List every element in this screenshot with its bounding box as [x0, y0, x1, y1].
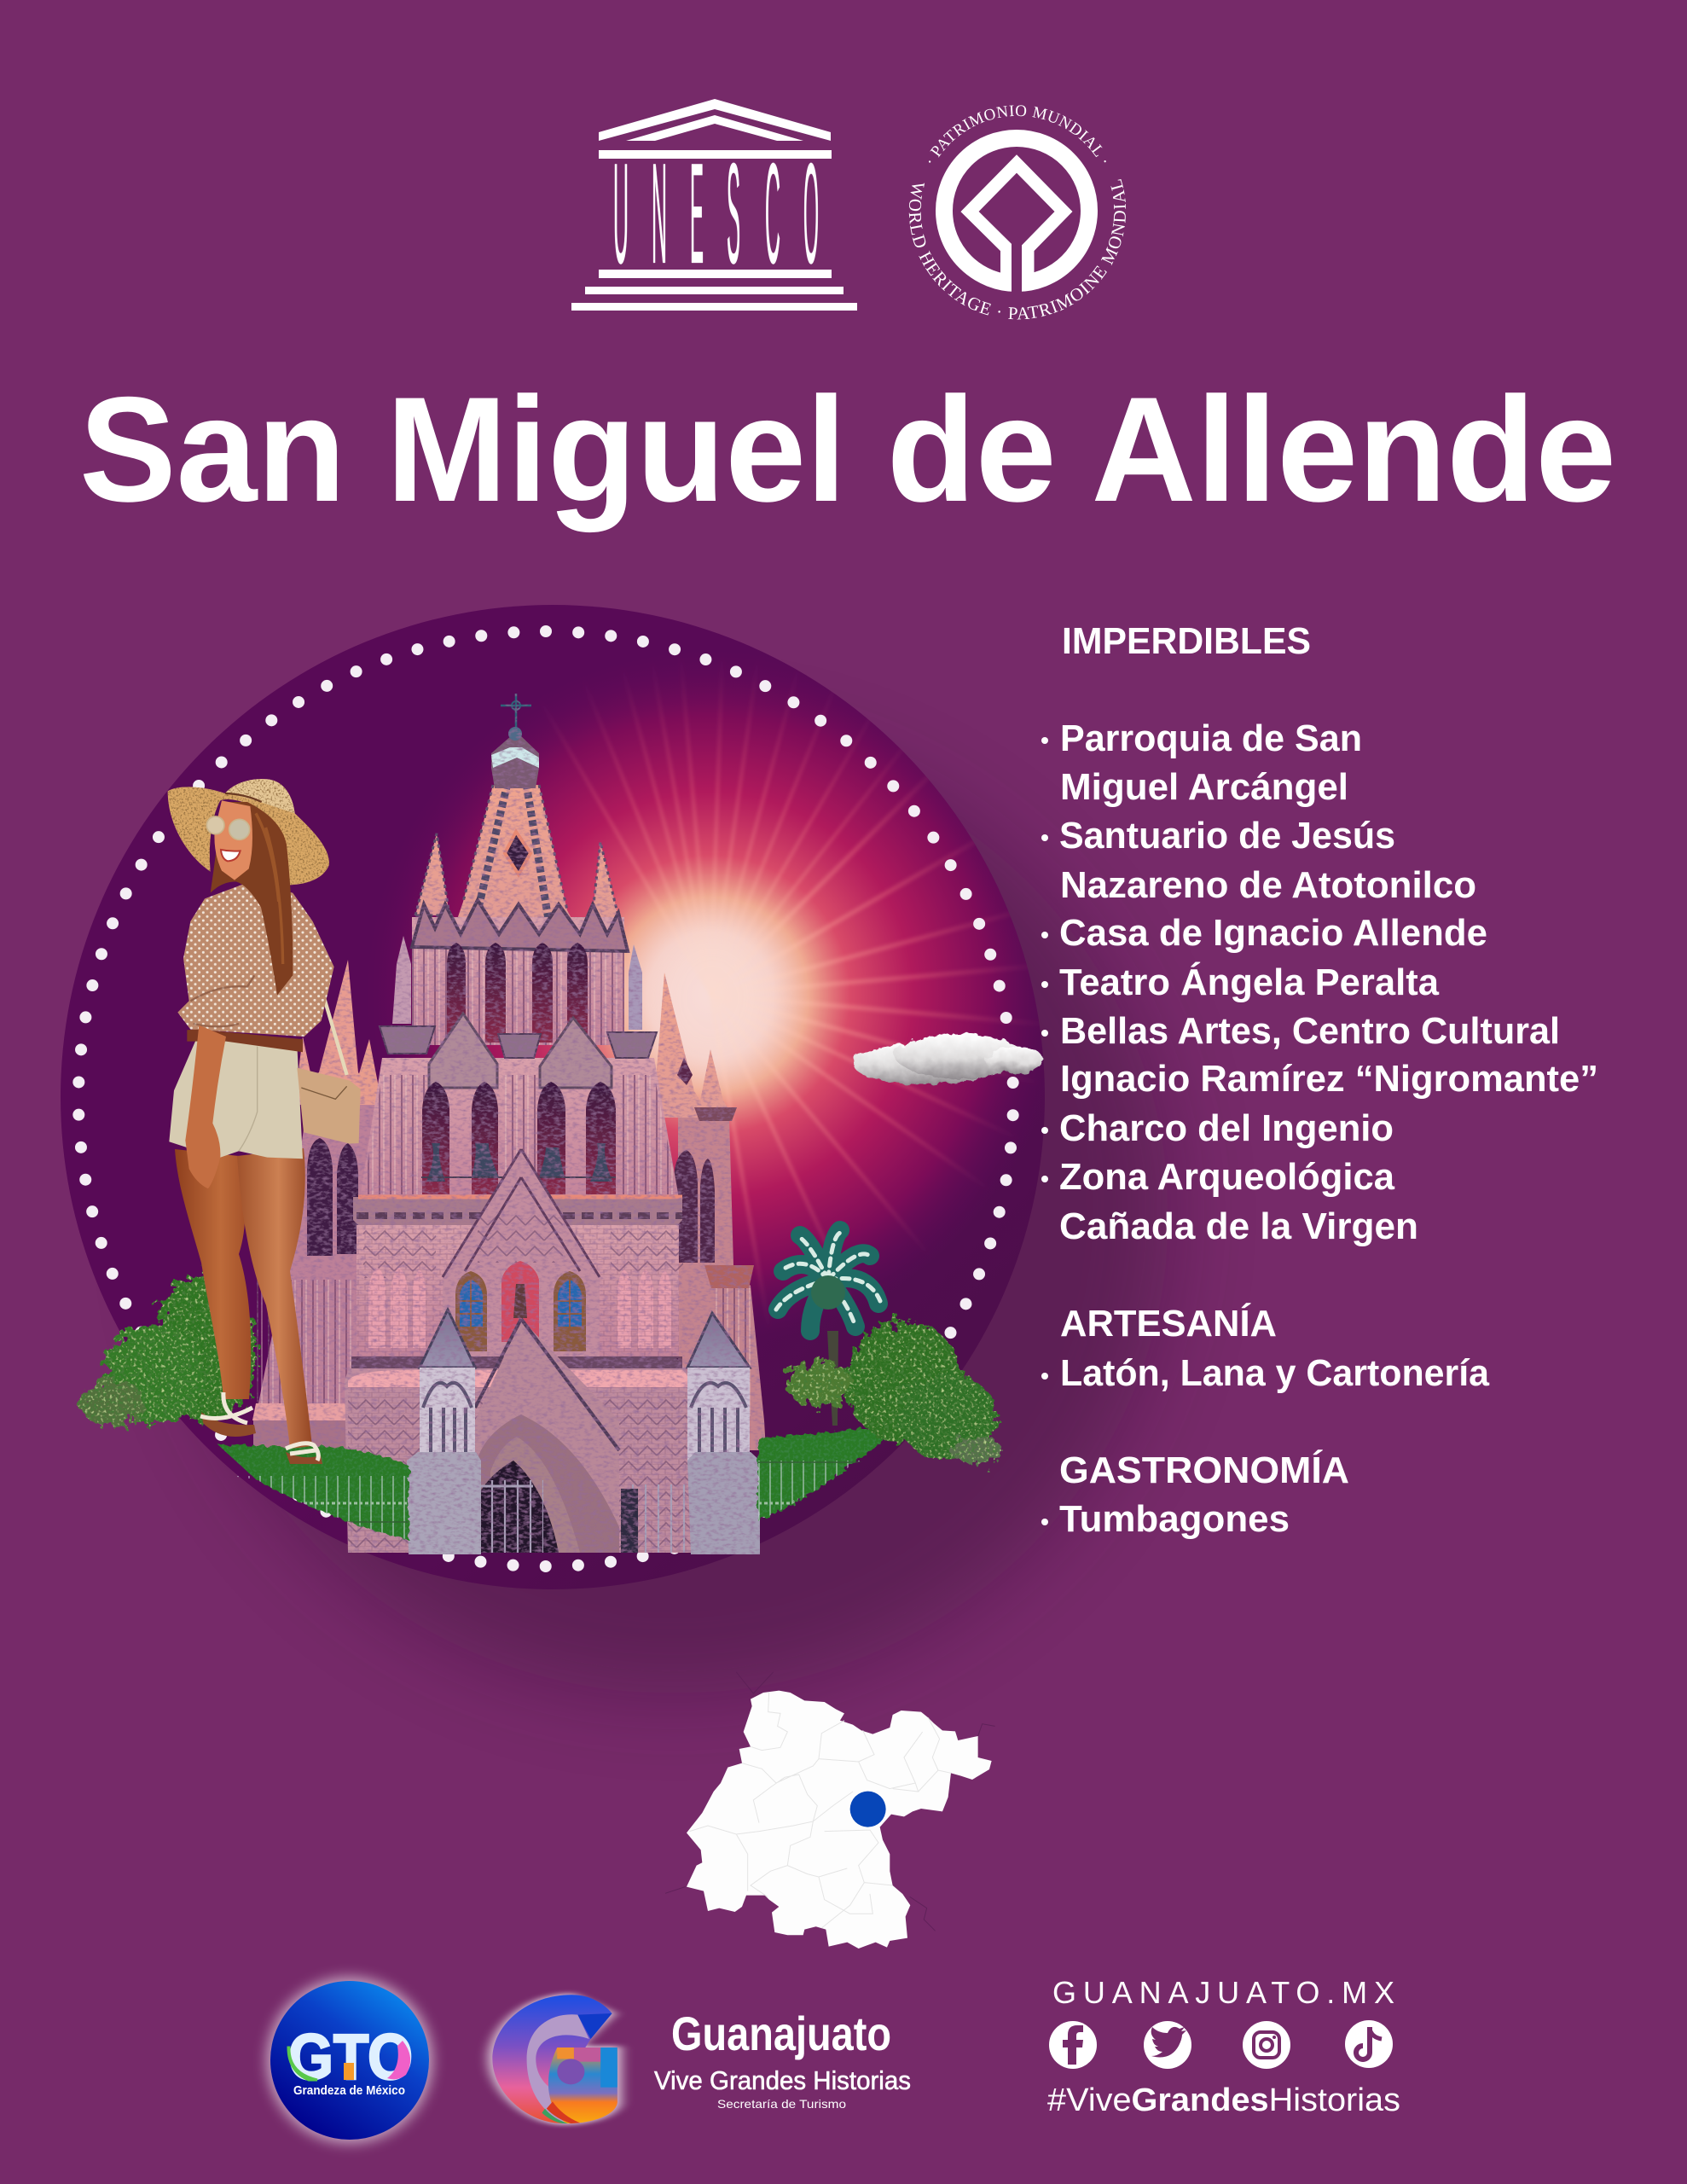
icon: tiktok: [1345, 2020, 1393, 2068]
hat: [168, 779, 329, 885]
list: must-see places: Ignacio Ramírez “Nigromante”: [1060, 1058, 1598, 1100]
left tree behind church: [80, 1273, 256, 1427]
railings: [421, 1176, 616, 1178]
logo: UNESCO temple: S: [727, 133, 740, 293]
logo: World Heritage emblem: [909, 105, 1126, 319]
shorts: [169, 1039, 303, 1159]
circle shadow: [179, 738, 1168, 1693]
heading: IMPERDIBLES: IMPERDIBLES: [1062, 620, 1311, 662]
list: must-see places: Santuario de Jesús: [1059, 815, 1395, 857]
cloud: [853, 1034, 1044, 1084]
list: must-see places: Zona Arqueológica: [1059, 1156, 1395, 1198]
logo: GTO: Grandeza de México: [293, 2083, 405, 2098]
sandals: [200, 1392, 322, 1464]
right tree: [786, 1321, 1002, 1464]
list: must-see places: Nazareno de Atotonilco: [1060, 864, 1476, 906]
second level: [359, 1058, 680, 1203]
hedges and fences: [217, 1425, 904, 1540]
logo: GTO: GTO: [288, 2021, 413, 2093]
icon: instagram: [1243, 2021, 1290, 2069]
list: must-see places: Cañada de la Virgen: [1059, 1205, 1418, 1247]
logo: World Heritage emblem: WORLD HERITAGE · PATRIMOINE MONDIAL: [909, 179, 1126, 319]
list: food: Tumbagones: [1059, 1498, 1290, 1540]
dotted ring: [78, 631, 1013, 1566]
sunglasses: [206, 816, 224, 834]
windows: [455, 1261, 586, 1351]
list: must-see places: Bellas Artes, Centro Cultural: [1060, 1010, 1560, 1052]
arm: [185, 1025, 226, 1188]
right wing: [678, 1101, 766, 1450]
text: O: [803, 133, 819, 293]
left gray pinnacle: [420, 1310, 475, 1368]
bag strap: [315, 967, 347, 1075]
church: [252, 694, 766, 1554]
left wing: [253, 1101, 375, 1450]
upper openings: [447, 943, 588, 1043]
bells: [426, 1143, 612, 1182]
bell openings: [422, 1082, 616, 1194]
right gray pinnacle: [687, 1313, 750, 1368]
cornice: [353, 1197, 682, 1229]
smile: [221, 850, 241, 861]
icon: twitter: [1144, 2021, 1191, 2069]
text: website: GUANAJUATO.MX: [1052, 1975, 1394, 2010]
lantern and cross: [491, 735, 539, 788]
text: Guanajuato brand: Secretaría de Turismo: [717, 2097, 846, 2111]
list: crafts: Latón, Lana y Cartonería: [1060, 1352, 1490, 1394]
balconies: [380, 1026, 657, 1058]
logo: UNESCO temple: C: [765, 133, 780, 293]
central spire: [452, 785, 580, 934]
belt: [187, 1030, 303, 1052]
panel: church illustration: [61, 605, 1168, 1693]
woman: [168, 779, 361, 1464]
title: San Miguel de Allende: [79, 367, 1616, 533]
right side door: [621, 1484, 693, 1553]
heading: GASTRONOMÍA: GASTRONOMÍA: [1059, 1449, 1349, 1491]
text: hashtag: #ViveGrandesHistorias: [1047, 2082, 1400, 2118]
lower tower: [357, 1225, 679, 1358]
list: must-see places: Miguel Arcángel: [1060, 766, 1348, 808]
gables: [429, 1014, 612, 1088]
text block: tourist list: [1041, 620, 1598, 1540]
palm tree: [776, 1230, 880, 1426]
location marker: [848, 1789, 889, 1830]
logo: UNESCO temple: [571, 99, 857, 311]
logo: GTO: [267, 1978, 432, 2143]
heading: ARTESANÍA: ARTESANÍA: [1060, 1302, 1277, 1345]
shirt: [177, 881, 334, 1037]
portal: [475, 1319, 619, 1553]
list: must-see places: Parroquia de San: [1060, 717, 1362, 759]
logo: UNESCO temple: U: [613, 133, 629, 293]
text: Guanajuato brand: Guanajuato: [671, 2007, 891, 2060]
pink niches: [368, 1268, 671, 1348]
purple disc: [61, 605, 1045, 1589]
list: must-see places: Teatro Ángela Peralta: [1059, 961, 1440, 1003]
bag: [297, 1068, 361, 1144]
logo: UNESCO temple: E: [690, 133, 704, 293]
list: must-see places: [1041, 717, 1598, 1247]
text: Guanajuato brand: [654, 2007, 911, 2111]
logo: World Heritage emblem: · PATRIMONIO MUNDIAL ·: [929, 105, 1106, 163]
logo: Guanajuato G: [489, 1994, 621, 2125]
text: Guanajuato brand: Vive Grandes Historias: [654, 2065, 911, 2095]
map of Guanajuato: [665, 1672, 995, 1949]
central gable: [443, 1149, 600, 1358]
upper tower: [412, 917, 624, 1045]
legs: [175, 1148, 312, 1449]
hair: [211, 802, 293, 996]
logo: UNESCO temple: N: [652, 133, 667, 293]
list: must-see places: Charco del Ingenio: [1059, 1107, 1394, 1149]
list: must-see places: Casa de Ignacio Allende: [1059, 912, 1487, 954]
side spires: [415, 834, 449, 915]
icon: facebook: [1049, 2021, 1097, 2069]
sun burst: [392, 671, 1038, 1319]
face: [214, 800, 252, 880]
pink ledge and base: [345, 1356, 691, 1553]
